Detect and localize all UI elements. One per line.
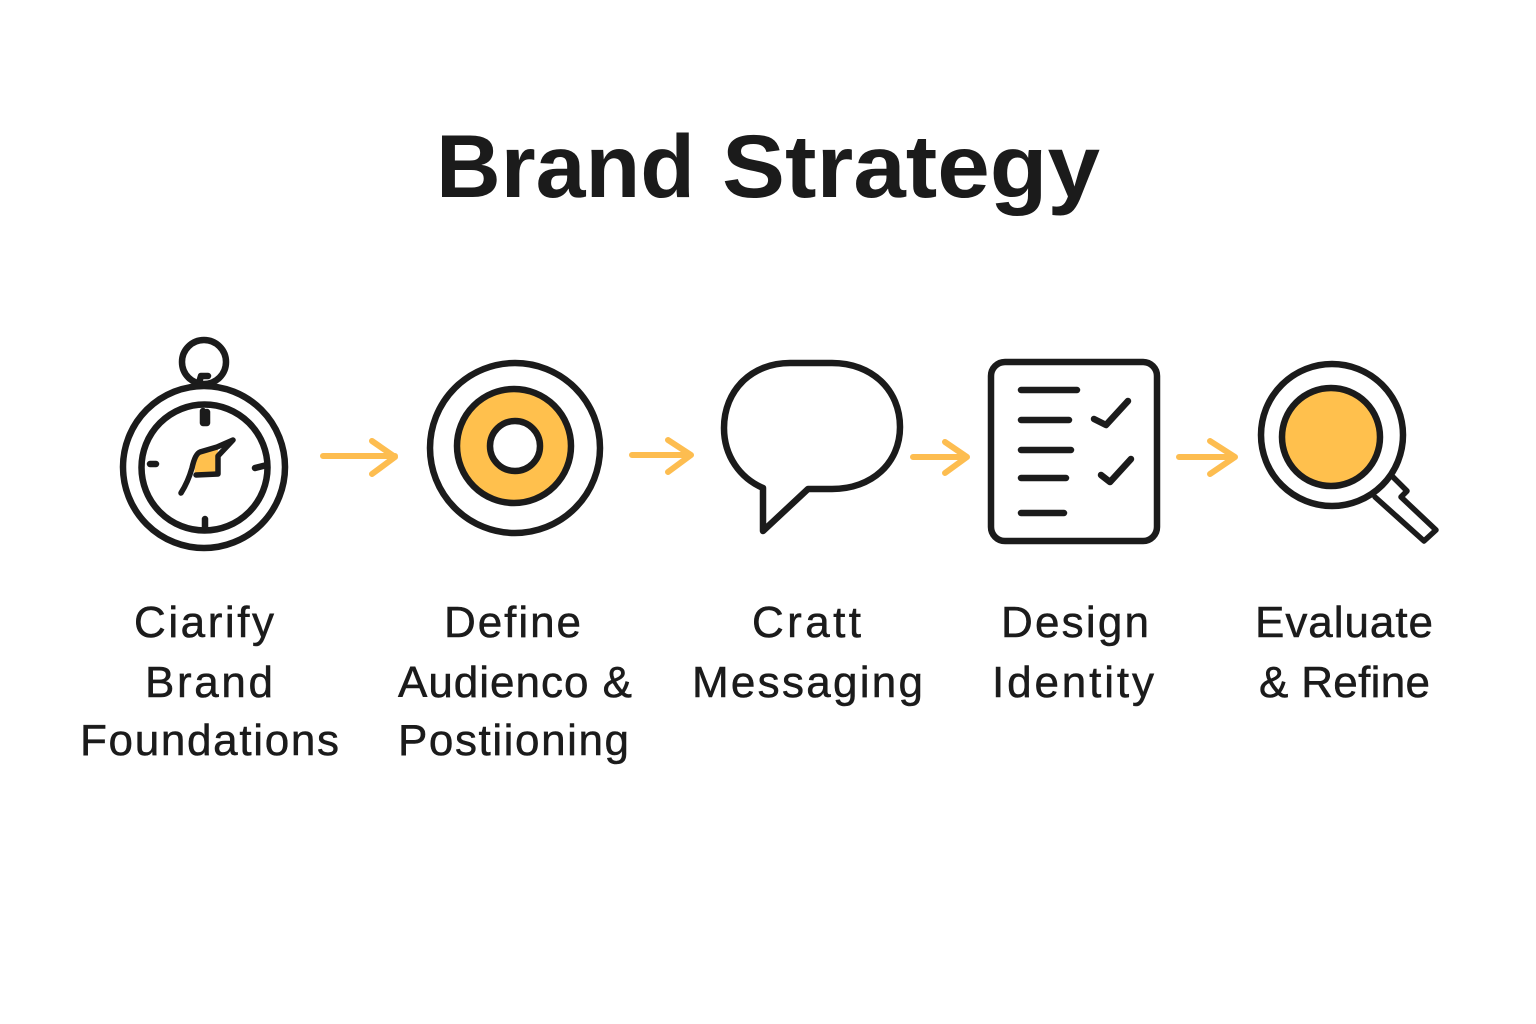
label: step 1: Foundations: [80, 716, 339, 765]
icon: magnifier: [1261, 364, 1436, 541]
label: step 5: [1255, 598, 1433, 707]
title: [436, 116, 1101, 216]
arrow 4: [1179, 441, 1235, 474]
label: step 2: [398, 598, 632, 765]
label: step 5: Evaluate: [1255, 598, 1433, 647]
label: step 2: Audienco &: [398, 658, 632, 707]
label: step 3: [692, 598, 923, 707]
label: step 3: Cratt: [752, 598, 861, 647]
label: step 3: Messaging: [692, 658, 923, 707]
arrow 2: [632, 440, 691, 472]
title: Strategy: [722, 116, 1101, 216]
label: step 1: [80, 598, 339, 765]
label: step 4: Identity: [992, 658, 1154, 707]
label: step 1: Brand: [145, 658, 273, 707]
label: step 4: [992, 598, 1154, 707]
title: Brand: [436, 116, 695, 216]
icon: checklist: [991, 362, 1157, 541]
label: step 1: Ciarify: [134, 598, 274, 647]
label: step 4: Design: [1001, 598, 1149, 647]
label: step 5: & Refine: [1259, 658, 1430, 707]
icon: target: [430, 363, 600, 533]
arrow 3: [913, 442, 967, 473]
label: step 2: Postiioning: [398, 716, 629, 765]
icon: compass: [123, 340, 285, 548]
icon: speech bubble: [724, 363, 900, 531]
label: step 2: Define: [444, 598, 581, 647]
arrow 1: [323, 441, 395, 474]
